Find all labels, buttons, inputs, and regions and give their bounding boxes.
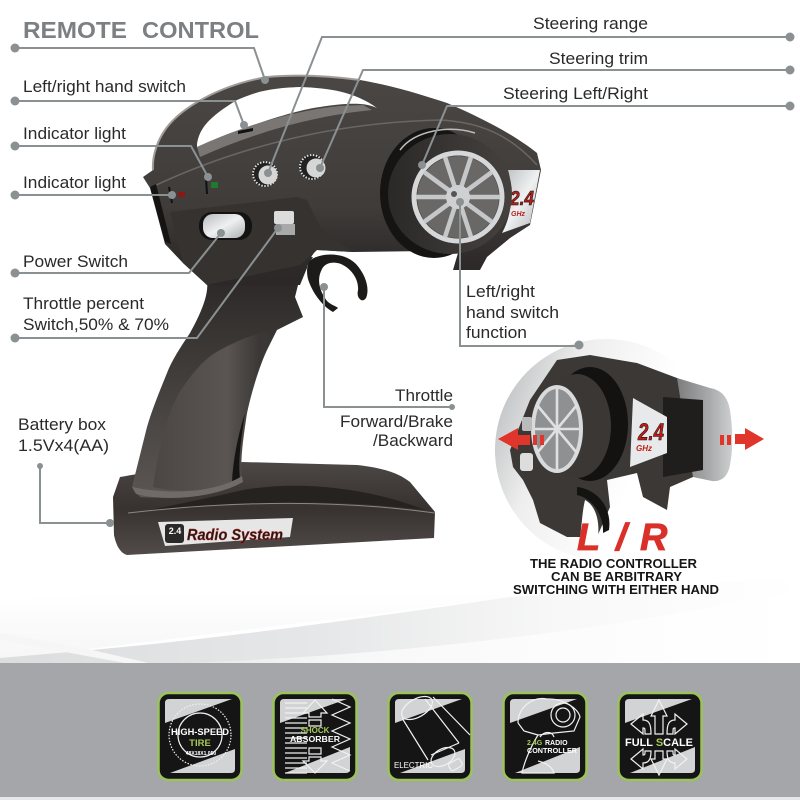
right labels: Steering Left/Right [503,85,648,103]
inset: left right switching illustration [495,339,732,561]
left labels: Switch,50% & 70% [23,316,169,334]
knob: steering range [252,161,278,187]
main remote control illustration: 2.4 [509,188,534,210]
right labels: /Backward [373,432,453,450]
inset caption: CAN BE ARBITRARY [551,570,683,584]
inset circle [495,339,717,561]
left labels: Indicator light [23,174,126,192]
left labels: Indicator light [23,125,126,143]
inset caption: SWITCHING WITH EITHER HAND [513,583,719,597]
body and handle [143,76,541,285]
left edge strip [150,184,171,244]
feature badge: 2.4g radio controller: 2.4G [527,740,543,747]
handle outline highlight [153,76,360,170]
L / R heading: / [614,517,630,559]
left labels: Throttle percent [23,295,144,313]
feature badge: high-speed tire: TIRE [189,738,211,749]
trigger [307,255,368,312]
base [113,462,435,555]
inset: left right switching illustration: GHz [636,444,652,453]
left labels: Battery box [18,416,107,434]
leader lines and dots [10,32,794,527]
end cap [677,378,732,481]
feature badge: electric [388,692,472,780]
inset: left right switching illustration: 2.4 [637,419,664,446]
feature badge: shock absorber [274,693,356,780]
L / R heading: L [577,517,600,559]
feature badge: 2.4g radio controller [504,693,586,780]
front panel [170,197,353,285]
feature badge: high-speed tire [158,693,242,780]
right arrow [720,428,764,450]
handle window [197,87,377,147]
feature badge: 2.4g radio controller: RADIO [545,740,568,747]
left labels: Left/right hand switch [23,78,186,96]
title: CONTROL [142,17,259,43]
label plate [502,170,540,233]
left labels: 1.5Vx4(AA) [18,437,109,455]
main remote control illustration: 2.4 [169,526,181,536]
L / R heading: R [640,517,668,559]
radio system label [158,518,293,546]
left labels [18,78,186,455]
feature badge: shock absorber: SHOCK [301,726,330,735]
right labels: Steering range [533,15,648,33]
title [23,17,259,43]
inset remote body [510,355,703,537]
right labels [340,15,648,450]
indicator lights [169,178,218,203]
right labels: Left/right [466,283,535,301]
inset caption: THE RADIO CONTROLLER [530,557,697,571]
feature badge: shock absorber: ABSORBER [290,735,340,744]
main remote control illustration [113,76,541,555]
feature badge: high-speed tire: HIGH-SPEED [171,727,229,738]
main remote control illustration: Radio System [187,527,283,544]
left arrow [498,428,544,450]
right labels: Throttle [395,387,453,405]
L / R heading [577,517,668,559]
main remote control illustration: GHz [511,211,526,218]
shoulder stripes [197,105,372,157]
left/right switch slot [238,128,253,134]
title: REMOTE [23,17,127,43]
right labels: hand switch [466,304,559,322]
grip [132,257,313,497]
feature badge: high-speed tire: 48X18X1.050 [186,751,216,757]
throttle percent switch [274,211,295,235]
right labels: Forward/Brake [340,413,453,431]
knob: steering trim [299,154,326,180]
left labels: Power Switch [23,253,128,271]
feature badge: full scale: FULL SCALE [625,737,693,749]
feature badge: full scale [618,693,702,780]
wheel [380,128,512,258]
right labels: Steering trim [549,50,648,68]
inset caption [513,557,719,597]
power switch [199,212,252,240]
right labels: function [466,324,527,342]
feature badge: electric: ELECTRIC [394,761,433,770]
feature badge: 2.4g radio controller: CONTROLLER [527,748,577,755]
